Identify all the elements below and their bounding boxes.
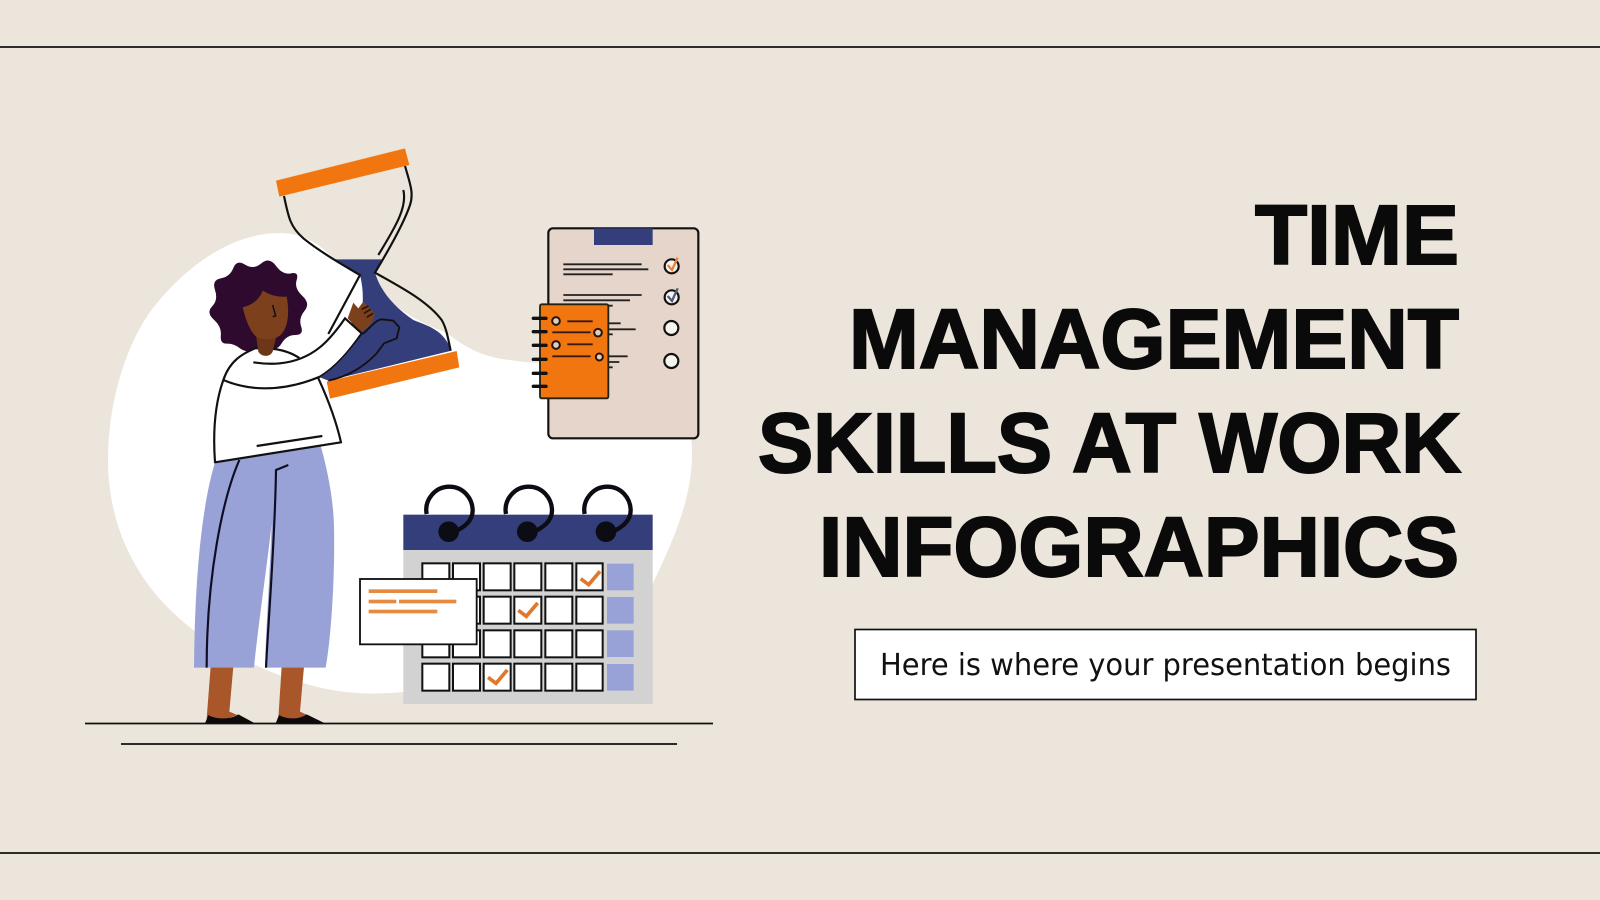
hourglass glass outline	[284, 166, 451, 351]
person trousers	[194, 440, 334, 668]
hourglass	[276, 148, 459, 399]
clipboard checkboxes	[664, 259, 679, 368]
notebook rings	[533, 318, 546, 386]
clipboard	[533, 228, 698, 438]
white background blob	[108, 233, 692, 694]
person shirt	[214, 348, 341, 462]
notebook	[533, 304, 608, 398]
person sleeve	[223, 318, 362, 388]
person head	[243, 291, 288, 356]
title: TIME	[1255, 188, 1459, 282]
title: MANAGEMENT	[849, 292, 1459, 386]
clipboard check marks	[668, 258, 678, 301]
calendar page	[403, 550, 653, 704]
title: SKILLS AT WORK	[758, 396, 1461, 490]
hourglass sand	[328, 259, 452, 381]
calendar binding rings	[426, 487, 631, 533]
notebook entries	[552, 321, 593, 356]
hourglass top bar	[276, 148, 409, 197]
title	[758, 188, 1461, 594]
calendar side blocks	[607, 564, 634, 691]
person neck	[256, 335, 277, 356]
calendar day cells	[422, 563, 603, 691]
clipboard board	[548, 228, 698, 438]
person face	[243, 291, 288, 339]
calendar header	[403, 515, 653, 550]
person legs and shoes	[194, 440, 334, 723]
ground lines	[85, 724, 713, 744]
subtitle box: Here is where your presentation begins	[880, 648, 1451, 683]
person far hand	[320, 319, 399, 381]
calendar check marks	[488, 571, 600, 683]
clipboard clip	[594, 228, 653, 245]
calendar note card	[360, 579, 477, 644]
hourglass bottom bar	[327, 351, 459, 399]
person hand	[348, 302, 375, 332]
clipboard text lines	[563, 264, 648, 367]
person	[194, 261, 399, 723]
person hair	[209, 261, 307, 353]
title: INFOGRAPHICS	[819, 500, 1459, 594]
subtitle box	[855, 630, 1476, 700]
calendar	[360, 487, 653, 704]
